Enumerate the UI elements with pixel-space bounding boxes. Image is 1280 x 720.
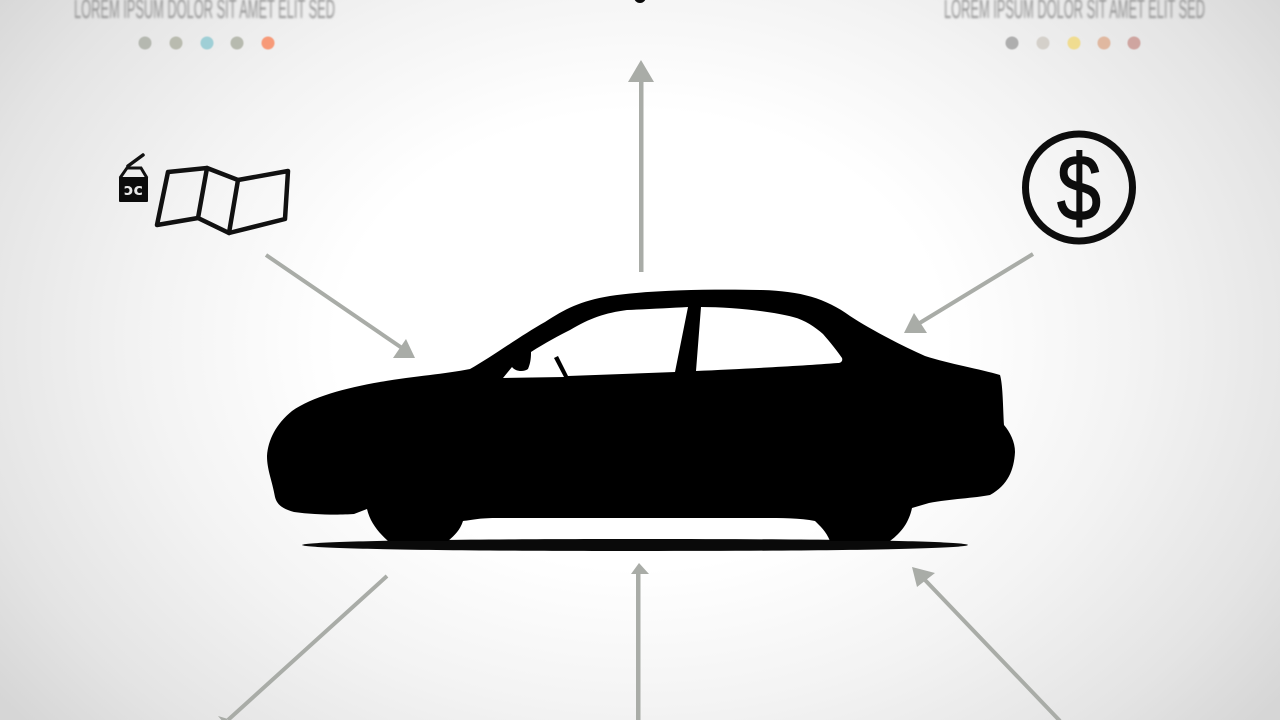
icon: dollar coin: $	[1057, 136, 1101, 241]
left caption block	[74, 0, 335, 50]
left colour dots	[138, 36, 274, 50]
ground shadow	[302, 539, 968, 551]
icon: small tag: ɔc	[124, 180, 143, 199]
arrow: lower right	[912, 567, 1060, 720]
arrow: up	[628, 60, 654, 272]
arrow: upper left to car	[266, 255, 415, 358]
right caption block	[944, 0, 1205, 50]
icon: small tag	[119, 155, 148, 202]
right colour dots	[1006, 36, 1140, 50]
car body	[267, 290, 1015, 541]
arrow: lower left	[218, 576, 387, 720]
arrow: lower centre	[631, 563, 649, 720]
icon: folded map	[157, 168, 288, 233]
car silhouette	[267, 290, 1015, 551]
top centre icon fragment	[634, 0, 646, 3]
arrow: upper right to car	[904, 254, 1033, 333]
icon: dollar coin	[1026, 134, 1132, 241]
